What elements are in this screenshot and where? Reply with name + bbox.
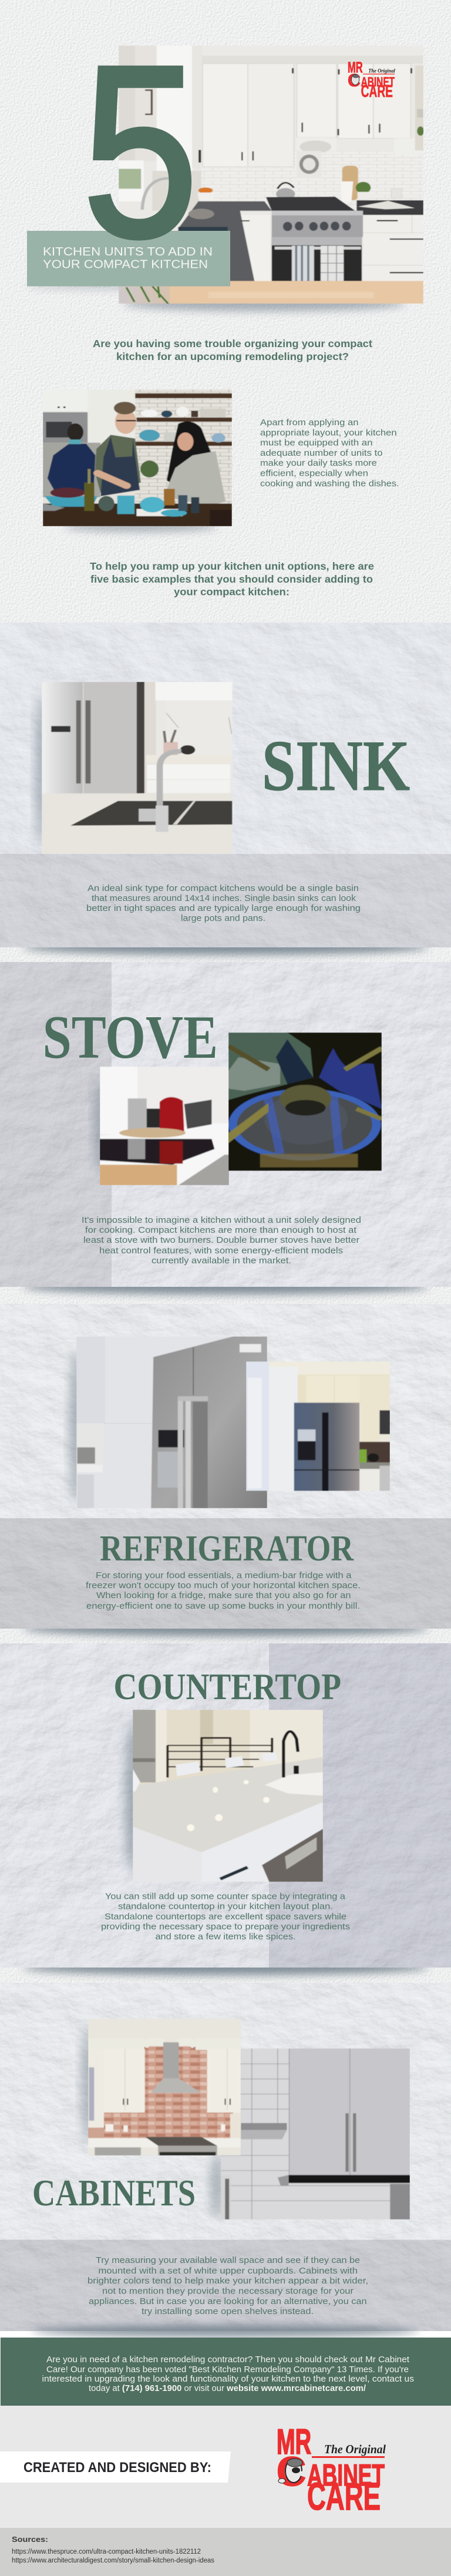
lead-in heading: [90, 560, 374, 598]
logo: Mr Cabinet Care (small): [348, 59, 395, 101]
credit ribbon: [0, 2451, 231, 2483]
title box: YOUR COMPACT KITCHEN: [43, 258, 208, 271]
body: refrigerator: [86, 1571, 361, 1611]
logo: Mr Cabinet Care: MR: [277, 2422, 311, 2461]
body: refrigerator: For storing your food essentials, a medium-bar fridge with a: [96, 1571, 352, 1580]
body: stove: currently available in the market.: [152, 1256, 291, 1266]
heading: cabinets: CABINETS: [32, 2172, 196, 2214]
logo: Mr Cabinet Care (small): CARE: [361, 82, 393, 101]
body: countertop: [101, 1892, 350, 1942]
body: cabinets: Try measuring your available wall space and see if they can be: [96, 2256, 360, 2265]
panel: countertop: [0, 1643, 451, 1968]
body: refrigerator: When looking for a fridge, make sure that you also go for an: [96, 1591, 351, 1600]
body: countertop: and store a few items like spices.: [155, 1932, 296, 1942]
photo: white kitchen with range: [119, 46, 424, 304]
body: sink: large pots and pans.: [181, 914, 265, 923]
photo: gas burner flame: [228, 1033, 382, 1171]
body: cabinets: not to mention they provide the necessary storage for your: [102, 2287, 354, 2296]
lead-in heading: five basic examples that you should consider adding to: [90, 573, 373, 585]
intro paragraph: efficient, especially when: [260, 469, 368, 479]
intro heading: Are you having some trouble organizing your compact: [93, 338, 372, 349]
logo: Mr Cabinet Care (small): ABINET: [361, 75, 395, 89]
body: refrigerator: freezer won't occupy too much of your horizontal kitchen space.: [86, 1581, 361, 1590]
panel: stove: [0, 962, 451, 1287]
body: countertop: providing the necessary space to prepare your ingredients: [101, 1922, 350, 1932]
intro paragraph: adequate number of units to: [260, 449, 383, 458]
body: sink: An ideal sink type for compact kitchens would be a single basin: [87, 884, 359, 893]
body: cabinets: mounted with a set of white upper cupboards. Cabinets with: [99, 2266, 358, 2276]
final panel shadow on white band: [0, 2325, 451, 2338]
heading: sink: SINK: [262, 725, 410, 806]
call to action band: interested in upgrading the look and functionality of your kitchen to the next level, contact us: [42, 2375, 414, 2384]
panel: sink: [0, 623, 451, 947]
intro heading: kitchen for an upcoming remodeling project?: [116, 351, 349, 362]
panel: refrigerator: [0, 1304, 451, 1629]
photo: white countertop: [126, 1710, 323, 1882]
call to action band: today at (714) 961-1900 or visit our website www.mrcabinetcare.com/: [89, 2384, 366, 2393]
body: refrigerator: energy-efficient one to save up some bucks in your monthly bill.: [86, 1602, 360, 1611]
intro paragraph: Apart from applying an: [260, 418, 358, 428]
call to action band: [1, 2338, 451, 2406]
photo: stainless fridge close-up: [70, 1337, 267, 1508]
sources band: Sources:: [12, 2535, 48, 2544]
logo: Mr Cabinet Care: CARE: [307, 2474, 381, 2518]
heading: countertop: COUNTERTOP: [114, 1666, 341, 1707]
body: cabinets: try installing some open shelves instead.: [142, 2307, 314, 2316]
body: countertop: standalone countertop in your kitchen layout plan.: [118, 1902, 333, 1911]
intro paragraph: make your daily tasks more: [260, 459, 377, 468]
panel shadows: [23, 940, 428, 1975]
title box: [27, 231, 230, 287]
intro paragraph: must be equipped with an: [260, 439, 372, 448]
intro heading: [93, 338, 372, 362]
footer: credits area: [0, 2338, 451, 2528]
logo: Mr Cabinet Care: ABINET: [307, 2459, 385, 2493]
credit ribbon: CREATED AND DESIGNED BY:: [23, 2460, 211, 2476]
photo: kettle on glass cooktop: [95, 1067, 229, 1185]
body: sink: [86, 884, 361, 923]
body: countertop: Standalone countertops are excellent space savers while: [105, 1912, 346, 1922]
logo: Mr Cabinet Care (small): The Original: [368, 68, 395, 73]
body: countertop: You can still add up some counter space by integrating a: [105, 1892, 346, 1902]
title box: KITCHEN UNITS TO ADD IN: [43, 246, 213, 258]
icon: cartoon cabinet man: [278, 2459, 309, 2483]
call to action band: Care! Our company has been voted "Best Kitchen Remodeling Company" 13 Times. If you're: [46, 2365, 409, 2375]
body: cabinets: brighter colors tend to help make your kitchen appear a bit wider,: [87, 2276, 368, 2286]
heading: stove: STOVE: [42, 1003, 218, 1071]
lead-in heading: your compact kitchen:: [174, 586, 290, 598]
lead-in heading: To help you ramp up your kitchen unit options, here are: [90, 560, 374, 572]
logo: Mr Cabinet Care: The Original: [324, 2442, 386, 2456]
photo: brick backsplash and hood: [82, 2019, 241, 2155]
intro paragraph: [260, 418, 399, 489]
hero photo and title block: [26, 15, 424, 311]
logo: Mr Cabinet Care (small): MR: [348, 59, 363, 76]
logo: Mr Cabinet Care: C: [277, 2449, 306, 2494]
body: stove: heat control features, with some energy-efficient models: [99, 1246, 343, 1256]
sources band: https://www.thespruce.com/ultra-compact-kitchen-units-1822112: [12, 2548, 201, 2555]
body: stove: It's impossible to imagine a kitchen without a unit solely designed: [82, 1216, 361, 1225]
photo: sink and faucet: [36, 682, 233, 854]
photo: gray cabinets and tile: [211, 2049, 410, 2219]
sources band: [0, 2528, 451, 2576]
big number 5: 5: [82, 15, 198, 288]
panel: cabinets: [0, 1983, 451, 2331]
photo: people cooking: [43, 389, 232, 532]
body: cabinets: appliances. But in case you are looking for an alternative, you can: [89, 2297, 366, 2306]
logo: Mr Cabinet Care (small): C: [348, 70, 361, 90]
body: cabinets: [87, 2256, 368, 2316]
sources band: https://www.architecturaldigest.com/story/small-kitchen-design-ideas: [12, 2557, 214, 2564]
heading: refrigerator: REFRIGERATOR: [100, 1529, 354, 1569]
photo: french-door fridge in kitchen: [246, 1361, 390, 1491]
intro paragraph: appropriate layout, your kitchen: [260, 429, 397, 438]
call to action band: Are you in need of a kitchen remodeling contractor? Then you should check out Mr Cabinet: [46, 2355, 409, 2365]
body: stove: least a stove with two burners. Double burner stoves have better: [83, 1236, 359, 1245]
body: stove: [82, 1216, 361, 1266]
body: sink: better in tight spaces and are typically large enough for washing: [86, 904, 361, 913]
intro paragraph: cooking and washing the dishes.: [260, 479, 399, 489]
body: sink: that measures around 14x14 inches. Single basin sinks can look: [92, 894, 356, 903]
body: stove: for cooking. Compact kitchens are more than enough to host at: [85, 1226, 356, 1235]
logo: Mr Cabinet Care: [277, 2422, 386, 2518]
